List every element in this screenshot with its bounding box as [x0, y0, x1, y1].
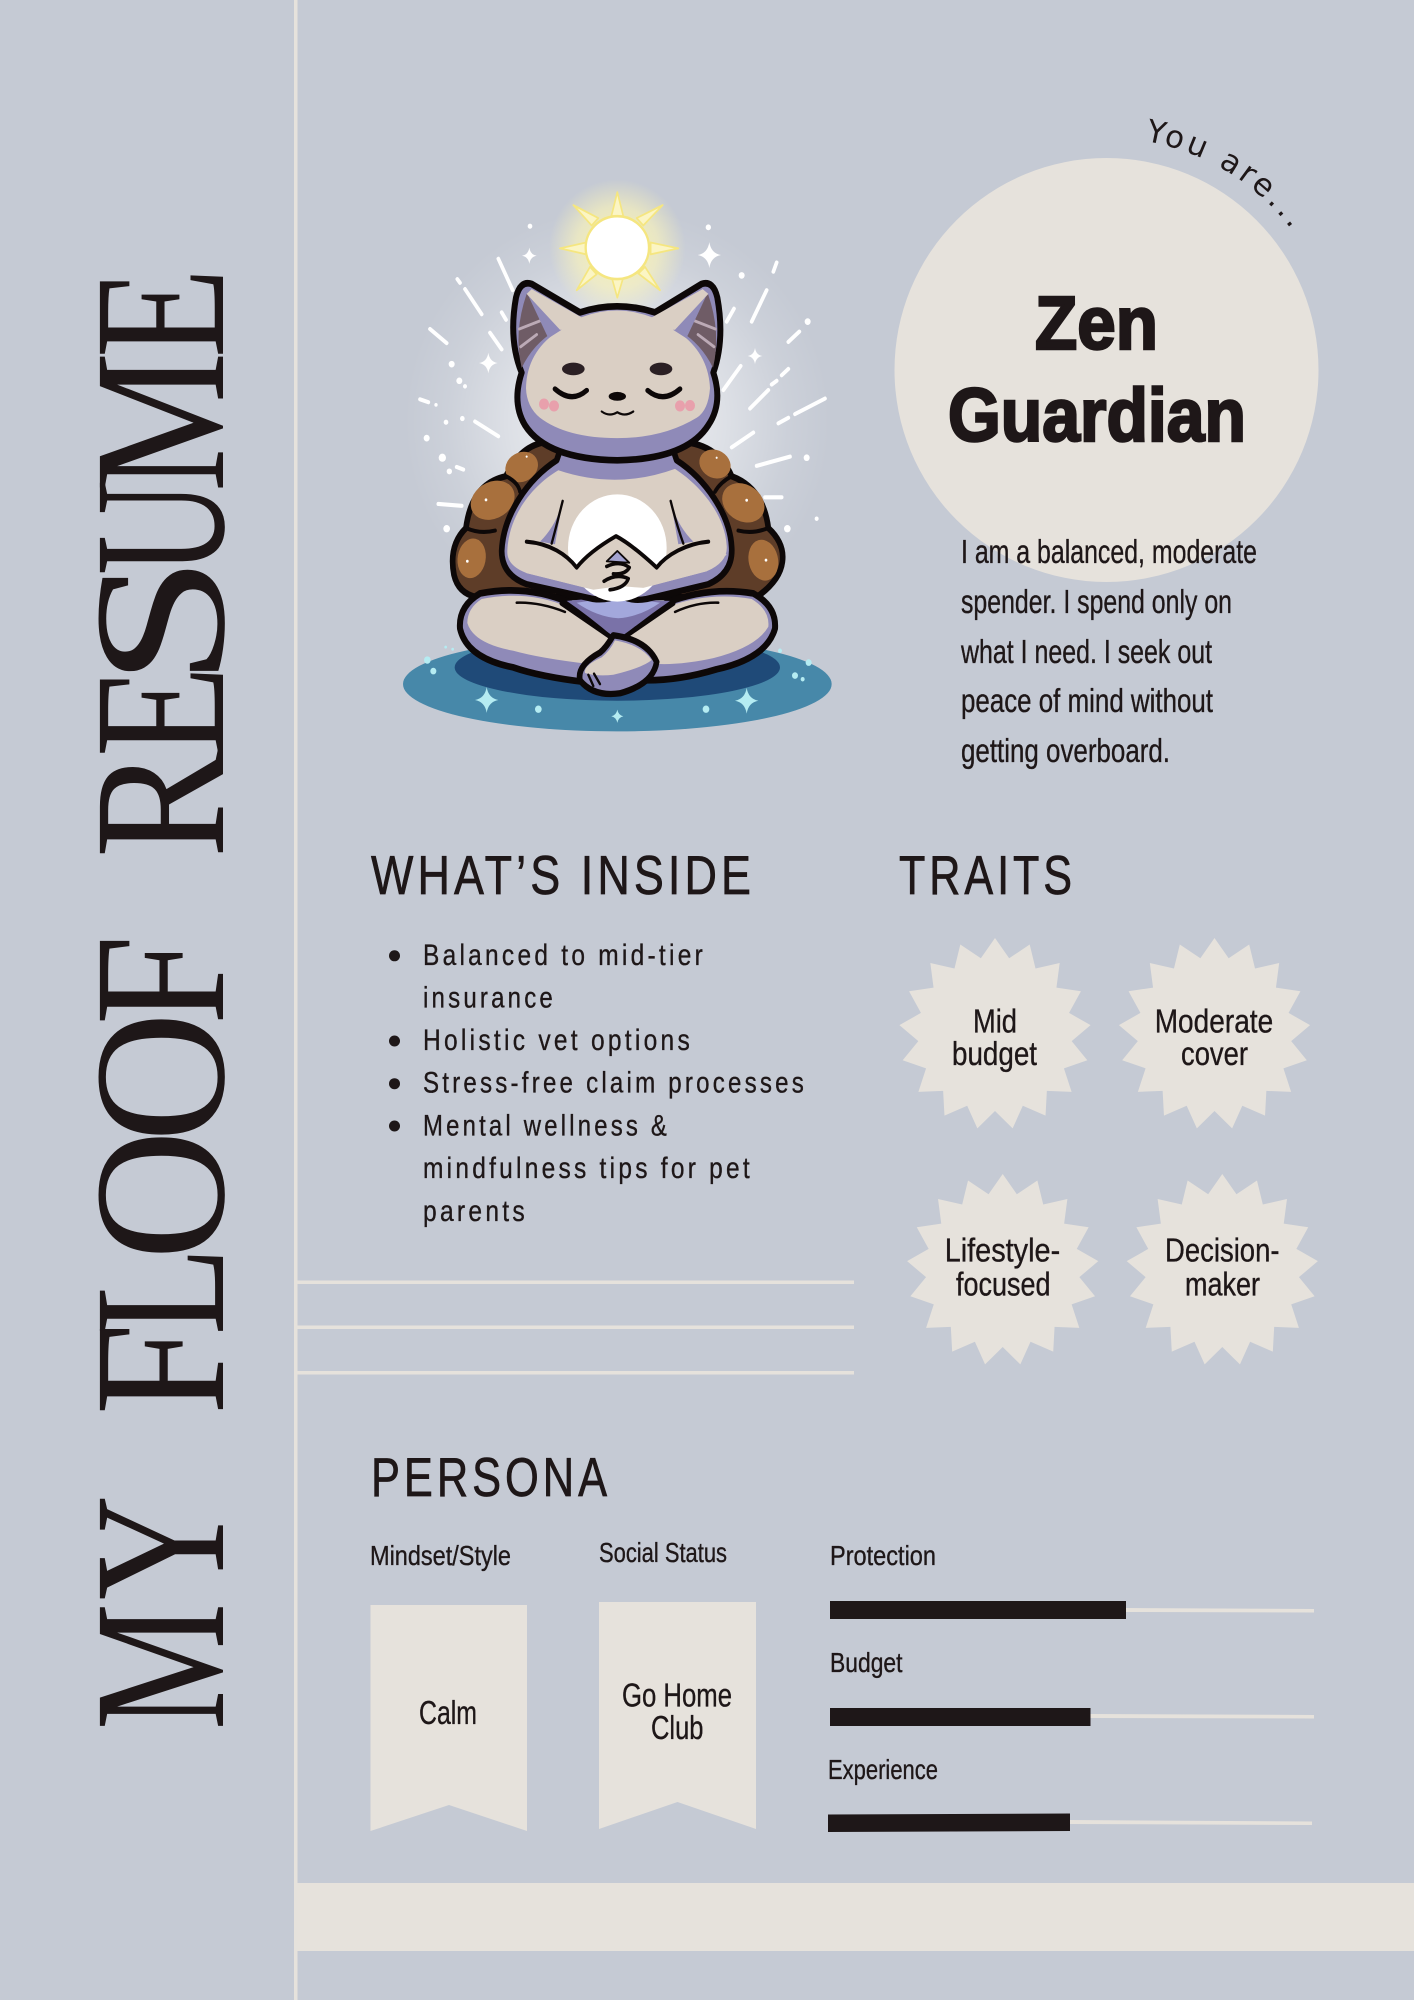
circle badge: you are zen guardian — [894, 118, 1318, 582]
title: my floof resume: U — [55, 480, 264, 575]
title: my floof resume: S — [55, 555, 264, 687]
list: what's inside: parents — [423, 1195, 528, 1228]
list: what's inside — [389, 939, 807, 1228]
trait badge: decision-maker: maker — [1185, 1266, 1260, 1303]
persona: mindset/style ribbon: Mindset/Style — [370, 1540, 511, 1571]
crossed legs — [460, 590, 775, 682]
title: my floof resume: M — [55, 1603, 264, 1730]
persona name: Guardian — [948, 373, 1246, 457]
persona: mindset/style ribbon: Calm — [419, 1694, 477, 1731]
persona name: Zen — [1035, 281, 1158, 365]
title: my floof resume: L — [55, 1247, 264, 1335]
list: what's inside: mindfulness tips for pet — [423, 1152, 753, 1185]
torso with arms — [502, 446, 732, 602]
title: my floof resume: O — [55, 1012, 264, 1142]
title: my floof resume: O — [55, 1130, 264, 1260]
persona name — [948, 281, 1246, 457]
bar: protection: Protection — [830, 1540, 936, 1571]
trait badge: mid budget: Mid — [973, 1003, 1017, 1040]
list: what's inside: Stress-free claim processes — [423, 1066, 807, 1100]
list: what's inside: Holistic vet options — [423, 1024, 693, 1057]
trait badge: decision-maker — [1127, 1174, 1318, 1364]
title: my floof resume — [55, 268, 264, 1730]
trait badge: lifestyle-focused: focused — [956, 1266, 1050, 1303]
bar: protection — [830, 1540, 1314, 1619]
trait badge: lifestyle-focused — [907, 1174, 1098, 1364]
list: what's inside: insurance — [423, 982, 556, 1014]
title: my floof resume: E — [55, 268, 264, 358]
heading: what's inside: WHAT’S INSIDE — [371, 844, 755, 906]
sparkle rays and dots — [420, 224, 825, 532]
footer band — [294, 1883, 1414, 1951]
bar: budget — [830, 1647, 1314, 1726]
curved caption: you are: You are... — [1150, 118, 1292, 226]
mat — [403, 634, 832, 731]
persona: social status ribbon: Social Status — [599, 1537, 727, 1568]
head with ears and closed eyes — [513, 283, 720, 460]
title: my floof resume: E — [55, 666, 264, 757]
persona: social status ribbon — [599, 1537, 756, 1829]
trait badge: decision-maker: Decision- — [1165, 1232, 1280, 1269]
description text — [960, 533, 1257, 769]
foot — [580, 635, 657, 694]
bar: budget: Budget — [830, 1647, 903, 1678]
trait badge: moderate cover: Moderate — [1155, 1003, 1273, 1040]
sun — [560, 192, 678, 298]
description text: spender. I spend only on — [961, 583, 1232, 620]
title: my floof resume: R — [55, 747, 264, 858]
persona: social status ribbon: Club — [651, 1709, 704, 1746]
trait badge: mid budget — [899, 938, 1091, 1128]
illustration: meditating cat with turtle shell — [403, 179, 832, 731]
description text: I am a balanced, moderate — [961, 533, 1257, 570]
list: what's inside: Mental wellness & — [423, 1109, 670, 1142]
turtle shell — [453, 441, 783, 597]
title: my floof resume: M — [55, 352, 264, 492]
bar: experience — [828, 1754, 1312, 1832]
title: my floof resume: F — [55, 935, 264, 1025]
list: what's inside: Balanced to mid-tier — [423, 939, 706, 972]
title: my floof resume: Y — [55, 1495, 264, 1600]
description text: what I need. I seek out — [960, 633, 1212, 670]
trait badge: lifestyle-focused: Lifestyle- — [945, 1232, 1060, 1269]
persona: social status ribbon: Go Home — [622, 1676, 732, 1714]
trait badge: moderate cover — [1119, 938, 1310, 1128]
description text: peace of mind without — [961, 682, 1213, 719]
heading: persona: PERSONA — [371, 1446, 611, 1508]
persona: mindset/style ribbon — [370, 1540, 527, 1831]
bar: experience: Experience — [828, 1754, 938, 1785]
title: my floof resume: F — [55, 1323, 264, 1415]
trait badge: mid budget: budget — [952, 1035, 1037, 1072]
trait badge: moderate cover: cover — [1181, 1035, 1248, 1072]
description text: getting overboard. — [961, 732, 1170, 769]
heading: traits: TRAITS — [899, 844, 1076, 906]
